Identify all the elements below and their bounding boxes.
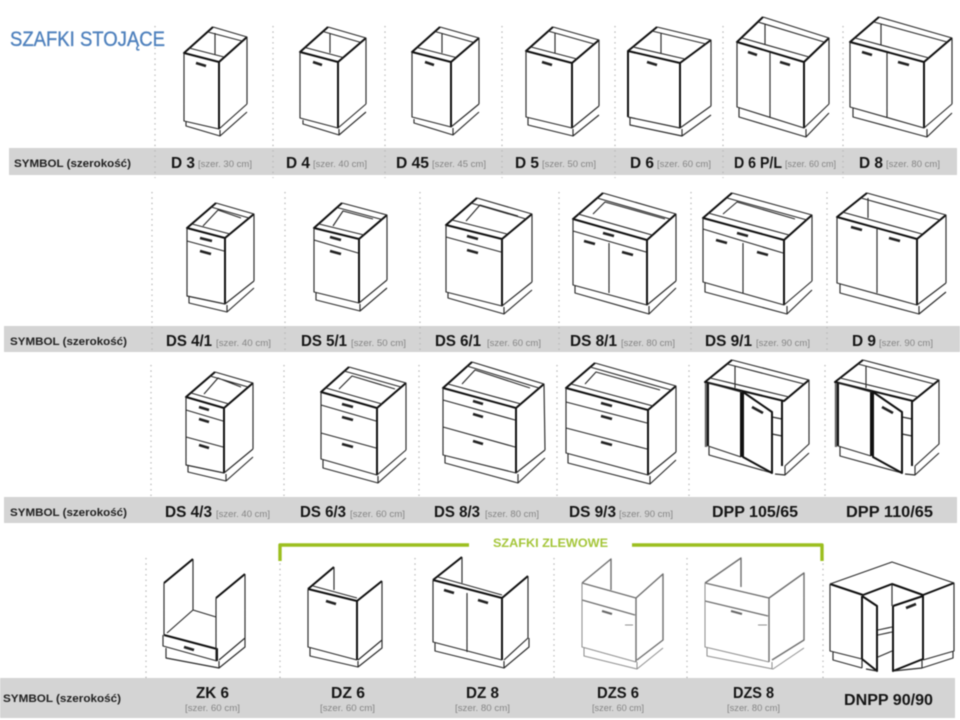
row 4 labels: [szer. 60 cm]	[592, 703, 644, 714]
cabinet DZS 8	[705, 558, 804, 669]
cabinet ZK 6	[163, 559, 245, 668]
row 2 labels: [szer. 50 cm]	[351, 338, 406, 349]
cabinet DPP 105/65	[705, 360, 809, 475]
row 4 labels: DZ 8	[466, 685, 499, 702]
cabinet D 6	[628, 27, 711, 136]
cabinet D 8	[850, 17, 952, 137]
cabinet D 5	[526, 27, 599, 136]
row 1 labels: [szer. 50 cm]	[542, 159, 596, 170]
row 4: oven, sink and corner cabinets	[163, 557, 954, 671]
row 3 labels: DPP 110/65	[846, 504, 933, 521]
row 3 labels: DS 8/3	[434, 504, 480, 521]
cabinet D 6 P/L	[737, 17, 829, 137]
row 3: drawer and corner cabinets	[186, 360, 939, 484]
bracket: sink cabinets	[280, 536, 822, 561]
row 2 labels: DS 6/1	[435, 333, 481, 350]
row 4 labels: [szer. 80 cm]	[727, 703, 780, 714]
row 2 labels: [szer. 90 cm]	[879, 338, 933, 349]
cabinet DS 8/3	[443, 362, 545, 483]
row 3 labels: DS 4/3	[165, 504, 212, 521]
row 3 labels: [szer. 80 cm]	[485, 509, 539, 520]
row 4 labels: DZ 6	[331, 685, 365, 702]
row 2 labels: [szer. 90 cm]	[756, 338, 810, 349]
row 4 labels	[3, 685, 933, 714]
cabinet D 3	[184, 27, 247, 136]
row 2 labels: DS 5/1	[301, 333, 347, 350]
cabinet DS 9/3	[566, 363, 676, 484]
row 3 labels: [szer. 60 cm]	[350, 509, 405, 520]
row 3 labels: SYMBOL (szerokość)	[10, 507, 127, 519]
cabinet D 4	[300, 27, 366, 135]
row 2 labels: DS 4/1	[166, 333, 212, 350]
row 1 labels: [szer. 60 cm]	[657, 159, 711, 170]
row 4 labels: SYMBOL (szerokość)	[3, 693, 121, 705]
row 1 labels: D 6	[630, 155, 654, 172]
row 1 labels: D 8	[859, 155, 883, 172]
cabinet DS 9/1	[703, 193, 812, 314]
row 2 labels: [szer. 80 cm]	[621, 338, 675, 349]
row 3 labels: [szer. 40 cm]	[216, 509, 270, 520]
cabinet DS 4/1	[187, 203, 254, 312]
cabinet DZS 6	[582, 559, 663, 669]
row 3 labels	[10, 504, 933, 521]
row 1 labels: [szer. 80 cm]	[886, 159, 940, 170]
cabinet DNPP 90/90	[830, 562, 954, 671]
row 1: standing cabinets	[184, 17, 952, 137]
cabinet DS 6/3	[321, 367, 406, 483]
row 1 labels: [szer. 30 cm]	[198, 159, 252, 170]
row 2 labels: D 9	[852, 333, 876, 350]
bracket: sink cabinets: SZAFKI ZLEWOWE	[493, 536, 608, 550]
row 3 labels: DPP 105/65	[712, 504, 798, 521]
row 2: drawer and door cabinets	[187, 193, 946, 314]
row 3 labels: DS 9/3	[569, 504, 616, 521]
row 4 labels: ZK 6	[196, 685, 229, 702]
row 4 labels: [szer. 60 cm]	[185, 703, 240, 714]
cabinet D 9	[837, 193, 946, 314]
cabinet DPP 110/65	[835, 360, 939, 475]
row 1 labels	[14, 155, 940, 172]
row 4 labels: [szer. 80 cm]	[455, 703, 510, 714]
row 4 labels: DZS 8	[733, 685, 774, 702]
row 1 labels: [szer. 45 cm]	[432, 159, 486, 170]
cabinet DZ 6	[308, 567, 382, 667]
cabinet DS 6/1	[446, 198, 532, 314]
cabinet DZ 8	[433, 557, 529, 668]
row 1 labels: D 4	[286, 155, 310, 172]
row 1 labels: D 3	[171, 155, 195, 172]
title: SZAFKI STOJĄCE	[10, 28, 165, 51]
row 1 labels: [szer. 40 cm]	[313, 159, 367, 170]
row 1 labels: D 5	[515, 155, 539, 172]
row 2 labels	[10, 333, 933, 350]
row 4 labels: DNPP 90/90	[844, 692, 933, 709]
grey symbol bands	[0, 148, 960, 718]
cabinet D 45	[412, 27, 479, 135]
row 1 labels: [szer. 60 cm]	[785, 159, 836, 170]
cabinet DS 4/3	[186, 372, 253, 481]
row 3 labels: DS 6/3	[300, 504, 346, 521]
row 4 labels: [szer. 60 cm]	[320, 703, 375, 714]
row 2 labels: DS 8/1	[570, 333, 617, 350]
row 2 labels: [szer. 40 cm]	[216, 338, 271, 349]
row 2 labels: [szer. 60 cm]	[487, 338, 541, 349]
row 3 labels: [szer. 90 cm]	[619, 509, 673, 520]
row 1 labels: D 6 P/L	[734, 155, 782, 172]
row 4 labels: DZS 6	[597, 685, 639, 702]
cabinet DS 8/1	[573, 193, 676, 314]
row 1 labels: D 45	[396, 155, 429, 172]
cabinet DS 5/1	[314, 203, 387, 311]
row 1 labels: SYMBOL (szerokość)	[14, 158, 131, 170]
row 2 labels: DS 9/1	[705, 333, 752, 350]
row 2 labels: SYMBOL (szerokość)	[10, 336, 127, 348]
